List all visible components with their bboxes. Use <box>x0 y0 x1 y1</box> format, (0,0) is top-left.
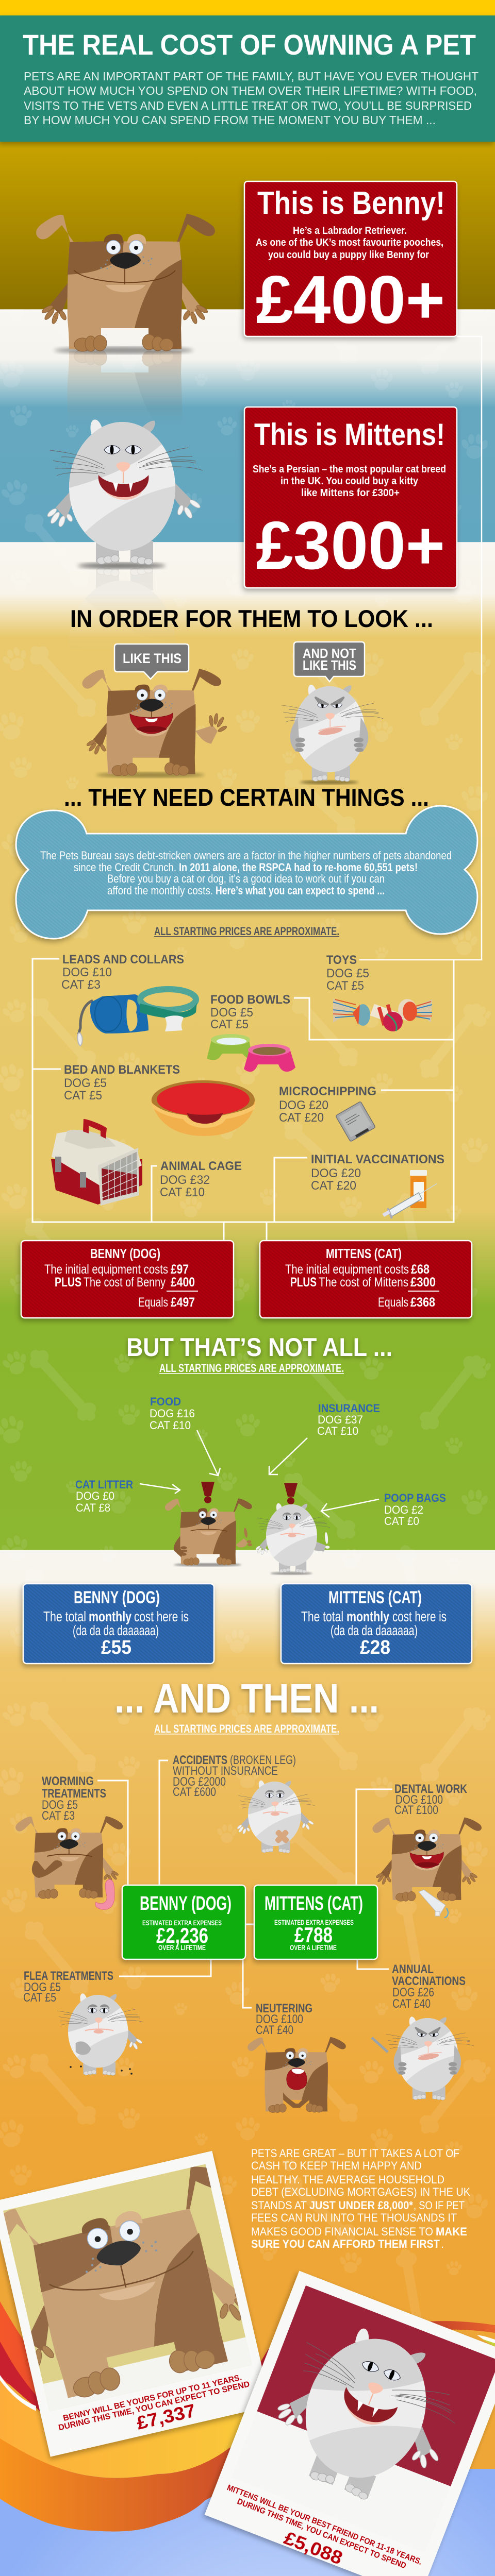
caption: £7,337 <box>135 2400 197 2434</box>
item: cat litter: DOG £0 <box>76 1489 114 1502</box>
panel: Mittens extra expenses: OVER A LIFETIME <box>290 1943 337 1952</box>
item: accidents: CAT £600 <box>173 1785 216 1799</box>
item: neutering: NEUTERING <box>256 2002 312 2015</box>
item: toys: DOG £5 <box>326 967 369 980</box>
panel: this is Benny <box>244 181 457 337</box>
panel: this is Mittens <box>244 407 457 588</box>
item: toys: CAT £5 <box>326 979 364 993</box>
panel: Benny monthly cost: BENNY (DOG) <box>74 1588 160 1607</box>
icon: fleas <box>70 2065 133 2075</box>
item: poop bags: POOP BAGS <box>384 1492 446 1504</box>
panel: this is Mittens: in the UK. You could buy a kitty <box>280 475 419 487</box>
panel: Mittens equipment total: Equals <box>378 1295 408 1310</box>
character: Mittens with fleas <box>57 1989 143 2076</box>
item: insurance: DOG £37 <box>318 1413 363 1426</box>
arrow: cat litter <box>140 1484 180 1494</box>
panel: Benny equipment total: £97 <box>171 1262 189 1277</box>
panel: bone shaped text: afford the monthly costs. <box>107 884 213 897</box>
panel: Mittens monthly cost: £28 <box>360 1637 390 1658</box>
item: accidents: ACCIDENTS <box>173 1753 227 1767</box>
item: annual vaccinations: ANNUAL <box>392 1962 434 1976</box>
item: annual vaccinations: VACCINATIONS <box>392 1974 466 1988</box>
polaroid: Mittens <box>204 2271 495 2576</box>
text block: pets are great: MAKES GOOD FINANCIAL SENSE TO <box>251 2225 433 2238</box>
panel: bone shaped text: In 2011 alone, the RSPCA had to re-home 60,551 pets! <box>179 861 418 874</box>
item: leads and collars: CAT £3 <box>61 978 101 992</box>
panel: Mittens equipment total: The initial equipment costs <box>285 1262 409 1277</box>
item: initial vaccinations: DOG £20 <box>311 1166 361 1180</box>
panel: Mittens equipment total: £300 <box>410 1275 436 1290</box>
speech bubble: and not like this: LIKE THIS <box>303 657 356 673</box>
caption <box>56 2372 255 2451</box>
item: food: CAT £10 <box>150 1419 191 1432</box>
item: cat litter <box>75 1478 133 1514</box>
character: Mittens the cat <box>46 412 203 569</box>
item: worming treatments: DOG £5 <box>42 1798 78 1812</box>
panel: Benny equipment total: The initial equipment costs <box>44 1262 168 1277</box>
panel: Mittens extra expenses: ESTIMATED EXTRA EXPENSES <box>274 1918 354 1926</box>
icon: exclamation mark over cat <box>284 1483 298 1504</box>
item: accidents: DOG £2000 <box>173 1775 226 1789</box>
icon: exclamation mark over dog <box>201 1482 214 1503</box>
caption: £5,088 <box>281 2527 345 2569</box>
item: food: FOOD <box>150 1395 181 1408</box>
panel: Mittens monthly cost: (da da da daaaaaa) <box>331 1622 418 1638</box>
character: scared Benny <box>248 2037 346 2113</box>
panel: Mittens extra expenses <box>254 1885 377 1959</box>
item: insurance: INSURANCE <box>318 1402 380 1415</box>
item: cat litter: CAT £8 <box>76 1501 110 1514</box>
text block: pets are great: PETS ARE GREAT – BUT IT TAKES A LOT OF <box>251 2147 459 2160</box>
item: leads and collars: DOG £10 <box>62 965 112 979</box>
heading: but that's not all: BUT THAT’S NOT ALL ... <box>126 1333 392 1362</box>
icon: lead and collar <box>77 989 197 1046</box>
polaroid: Benny <box>0 2147 288 2461</box>
panel: Mittens extra expenses: MITTENS (CAT) <box>265 1893 363 1914</box>
speech bubble: and not like this <box>294 642 365 682</box>
text block: pets are great: FEES CAN RUN INTO THE THOUSANDS IT <box>251 2211 457 2224</box>
item: bed and blankets: DOG £5 <box>64 1076 107 1090</box>
character: happy Benny <box>82 669 227 778</box>
background pattern of paws and bones <box>0 309 495 2318</box>
panel: Benny equipment total: BENNY (DOG) <box>90 1246 160 1261</box>
panel: Benny equipment total: £400 <box>171 1275 195 1290</box>
benny reflection <box>67 350 182 412</box>
item: food bowls: CAT £5 <box>210 1018 249 1031</box>
item: food: DOG £16 <box>150 1407 195 1420</box>
item: initial vaccinations: CAT £20 <box>311 1179 356 1193</box>
character: Benny the dog <box>36 214 215 354</box>
panel: Benny extra expenses: ESTIMATED EXTRA EXPENSES <box>142 1919 222 1927</box>
panel: Mittens monthly cost <box>281 1584 472 1664</box>
item: animal cage: ANIMAL CAGE <box>160 1159 242 1173</box>
heading: and then: ... AND THEN ... <box>114 1675 379 1721</box>
panel: Benny monthly cost: The total <box>43 1608 86 1624</box>
character: Benny with worm <box>15 1816 123 1909</box>
item: dental work: DOG £100 <box>395 1793 443 1807</box>
item: flea treatments <box>23 1969 113 2005</box>
item: animal cage: DOG £32 <box>160 1173 210 1187</box>
character: Mittens with plaster <box>237 1776 315 1853</box>
item: food bowls: FOOD BOWLS <box>210 993 290 1007</box>
text block: pets are great: CASH TO KEEP THEM HAPPY AND <box>251 2159 422 2172</box>
icon: pet carrier <box>51 1119 142 1206</box>
item: food bowls <box>207 993 295 1072</box>
text block: pets are great: MAKE <box>436 2225 467 2238</box>
panel: Benny monthly cost: monthly <box>89 1608 131 1624</box>
item: food bowls: DOG £5 <box>210 1006 253 1020</box>
icon: microchip <box>336 1101 375 1142</box>
item: dental work <box>394 1782 468 1817</box>
icon: pet bed <box>151 1080 255 1136</box>
item: worming treatments <box>42 1774 106 1823</box>
panel: Benny monthly cost <box>23 1584 214 1664</box>
caption: BENNY WILL BE YOURS FOR UP TO 11 YEARS. <box>62 2373 243 2423</box>
item: flea treatments: DOG £5 <box>24 1980 61 1994</box>
character: Benny with toothpaste <box>372 1817 482 1918</box>
intro paragraph: BY HOW MUCH YOU CAN SPEND FROM THE MOMENT YOU BUY THEM ... <box>24 113 436 127</box>
character: cross Mittens with syringe <box>372 2012 474 2100</box>
panel: this is Benny: £400+ <box>256 262 445 337</box>
text block: pets are great: , SO IF PET <box>414 2199 465 2212</box>
item: food <box>150 1395 195 1432</box>
panel: Mittens equipment total: PLUS <box>290 1275 317 1290</box>
item: toys <box>326 953 432 1031</box>
text block: pets are great: STANDS AT <box>251 2199 307 2212</box>
item: microchipping: DOG £20 <box>279 1098 328 1112</box>
panel: bone shaped text: since the Credit Crunch. <box>74 861 176 874</box>
item: bed and blankets: CAT £5 <box>64 1089 102 1103</box>
icon: food bowls <box>207 1034 295 1072</box>
item: dental work: CAT £100 <box>394 1803 438 1817</box>
arrow: insurance <box>269 1438 307 1475</box>
panel: Mittens equipment total: The cost of Mittens <box>319 1275 408 1290</box>
item: accidents: WITHOUT INSURANCE <box>173 1764 278 1778</box>
caption: DURING THIS TIME, YOU CAN EXPECT TO SPEND <box>236 2497 407 2570</box>
caption: DURING THIS TIME, YOU CAN EXPECT TO SPEND <box>58 2380 251 2432</box>
item: poop bags: DOG £2 <box>384 1503 423 1516</box>
icon: syringe <box>372 2038 388 2052</box>
top yellow strip <box>0 0 495 16</box>
character: worried Benny <box>165 1498 252 1567</box>
panel: Benny monthly cost: cost here is <box>134 1608 189 1624</box>
panel: Mittens monthly cost: monthly <box>346 1608 389 1624</box>
item: leads and collars: LEADS AND COLLARS <box>62 953 184 967</box>
character: worried Mittens <box>255 1500 330 1575</box>
item: animal cage: CAT £10 <box>160 1185 205 1199</box>
item: annual vaccinations <box>392 1962 466 2011</box>
item: neutering: DOG £100 <box>256 2012 303 2026</box>
panel: Benny extra expenses: £2,236 <box>156 1923 208 1947</box>
item: animal cage <box>51 1119 242 1206</box>
panel: Mittens equipment total: £368 <box>410 1295 435 1310</box>
connector lines: extras <box>97 1760 392 2008</box>
panel: Benny equipment total: The cost of Benny <box>84 1275 166 1290</box>
panel: bone shaped text <box>16 806 477 939</box>
icon: worm <box>95 1879 114 1909</box>
item: worming treatments: TREATMENTS <box>42 1787 106 1801</box>
panel: this is Benny: As one of the UK’s most favourite pooches, <box>256 236 443 248</box>
panel: bone shaped text: Here’s what you can expect to spend ... <box>216 884 385 897</box>
text block: pets are great: . <box>441 2238 444 2250</box>
intro paragraph: PETS ARE AN IMPORTANT PART OF THE FAMILY, BUT HAVE YOU EVER THOUGHT <box>24 70 478 83</box>
note: starting prices: ALL STARTING PRICES ARE APPROXIMATE. <box>154 925 339 938</box>
item: flea treatments: CAT £5 <box>23 1991 56 2005</box>
item: dental work: DENTAL WORK <box>394 1782 468 1796</box>
item: microchipping <box>279 1084 376 1142</box>
character: cross Mittens <box>281 680 383 784</box>
item: bed and blankets: BED AND BLANKETS <box>64 1063 180 1077</box>
arrow: poop bags <box>321 1499 379 1517</box>
item: accidents <box>173 1753 296 1799</box>
item: bed and blankets <box>64 1063 255 1136</box>
text block: pets are great: JUST UNDER £8,000* <box>309 2199 413 2212</box>
item: accidents: (BROKEN LEG) <box>230 1753 296 1767</box>
panel: Benny extra expenses: OVER A LIFETIME <box>158 1943 206 1952</box>
panel: this is Mittens: £300+ <box>256 507 445 583</box>
panel: Mittens monthly cost: The total <box>301 1608 343 1624</box>
intro paragraph <box>24 70 478 127</box>
panel: this is Benny: This is Benny! <box>257 185 445 221</box>
item: worming treatments: CAT £3 <box>42 1809 75 1823</box>
item: toys: TOYS <box>326 953 357 967</box>
panel: Benny extra expenses: BENNY (DOG) <box>140 1893 232 1914</box>
mittens reflection <box>70 567 153 631</box>
panel: bone shaped text: Before you buy a cat or dog, it’s a good idea to work out if you can <box>107 872 385 885</box>
header panel <box>0 15 495 142</box>
heading: in order for them to look: IN ORDER FOR THEM TO LOOK ... <box>70 605 433 632</box>
connector line from cat panel to toys <box>359 336 482 960</box>
item: microchipping: MICROCHIPPING <box>279 1084 376 1098</box>
panel: Benny equipment total: PLUS <box>55 1275 81 1290</box>
arrow: food <box>197 1430 220 1476</box>
panel: Benny equipment total <box>21 1241 234 1318</box>
panel: Benny monthly cost: (da da da daaaaaa) <box>73 1622 159 1638</box>
item: annual vaccinations: CAT £40 <box>392 1997 431 2011</box>
item: worming treatments: WORMING <box>42 1774 94 1788</box>
item: flea treatments: FLEA TREATMENTS <box>24 1969 113 1983</box>
icon: bottle and syringe <box>382 1170 437 1218</box>
item: leads and collars <box>61 953 197 1046</box>
item: insurance <box>317 1402 380 1437</box>
panel: Mittens extra expenses: £788 <box>294 1923 333 1947</box>
icon: rope toy <box>333 998 432 1031</box>
item: neutering: CAT £40 <box>256 2023 293 2037</box>
item: initial vaccinations <box>311 1153 444 1218</box>
text block: pets are great <box>251 2147 470 2250</box>
panel: Benny equipment total: Equals <box>138 1295 168 1310</box>
panel: this is Benny: you could buy a puppy like Benny for <box>268 249 429 261</box>
speech bubble: like this <box>114 644 189 679</box>
panel: Mittens monthly cost: MITTENS (CAT) <box>328 1588 422 1607</box>
panel: Benny monthly cost: £55 <box>101 1637 131 1658</box>
panel: this is Benny: He’s a Labrador Retriever. <box>293 225 407 236</box>
panel: Mittens equipment total: £68 <box>411 1262 430 1277</box>
item: initial vaccinations: INITIAL VACCINATIONS <box>311 1153 444 1166</box>
item: insurance: CAT £10 <box>317 1425 358 1437</box>
rainbow and sky <box>0 2301 495 2576</box>
speech bubble: like this: LIKE THIS <box>123 651 182 666</box>
item: annual vaccinations: DOG £26 <box>392 1986 434 1999</box>
item: cat litter: CAT LITTER <box>75 1478 133 1491</box>
item: poop bags: CAT £0 <box>384 1515 419 1528</box>
panel: Mittens equipment total <box>260 1241 472 1318</box>
text block: pets are great: HEALTHY. THE AVERAGE HOUSEHOLD <box>251 2173 444 2186</box>
panel: Mittens equipment total: MITTENS (CAT) <box>326 1246 402 1261</box>
panel: this is Mittens: She’s a Persian – the most popular cat breed <box>253 463 446 475</box>
item: poop bags <box>384 1492 446 1528</box>
connector lines: equipment <box>32 959 454 1241</box>
panel: Benny equipment total: £497 <box>171 1295 195 1310</box>
panel: this is Mittens: like Mittens for £300+ <box>301 487 400 499</box>
text block: pets are great: DEBT (EXCLUDING MORTGAGES) IN THE UK <box>251 2185 470 2198</box>
text block: pets are great: SURE YOU CAN AFFORD THEM FIRST <box>251 2238 440 2250</box>
intro paragraph: VISITS TO THE VETS AND EVEN A LITTLE TREAT OR TWO, YOU’LL BE SURPRISED <box>24 99 472 112</box>
intro paragraph: ABOUT HOW MUCH YOU SPEND ON THEM OVER THEIR LIFETIME? WITH FOOD, <box>24 84 477 97</box>
icon: plaster <box>274 1829 290 1844</box>
item: microchipping: CAT £20 <box>279 1111 324 1125</box>
caption: MITTENS WILL BE YOUR BEST FRIEND FOR 11-18 YEARS. <box>226 2483 423 2567</box>
icon: toothpaste <box>419 1890 448 1918</box>
item: neutering <box>256 2002 312 2037</box>
speech bubble: and not like this: AND NOT <box>303 646 356 661</box>
note: starting prices: ALL STARTING PRICES ARE APPROXIMATE. <box>159 1362 344 1375</box>
panel: Benny extra expenses <box>122 1885 245 1959</box>
heading: they need certain things: ... THEY NEED CERTAIN THINGS ... <box>64 784 429 811</box>
note: starting prices: ALL STARTING PRICES ARE APPROXIMATE. <box>154 1722 339 1735</box>
panel: this is Mittens: This is Mittens! <box>254 417 445 452</box>
panel: Mittens monthly cost: cost here is <box>392 1608 447 1624</box>
